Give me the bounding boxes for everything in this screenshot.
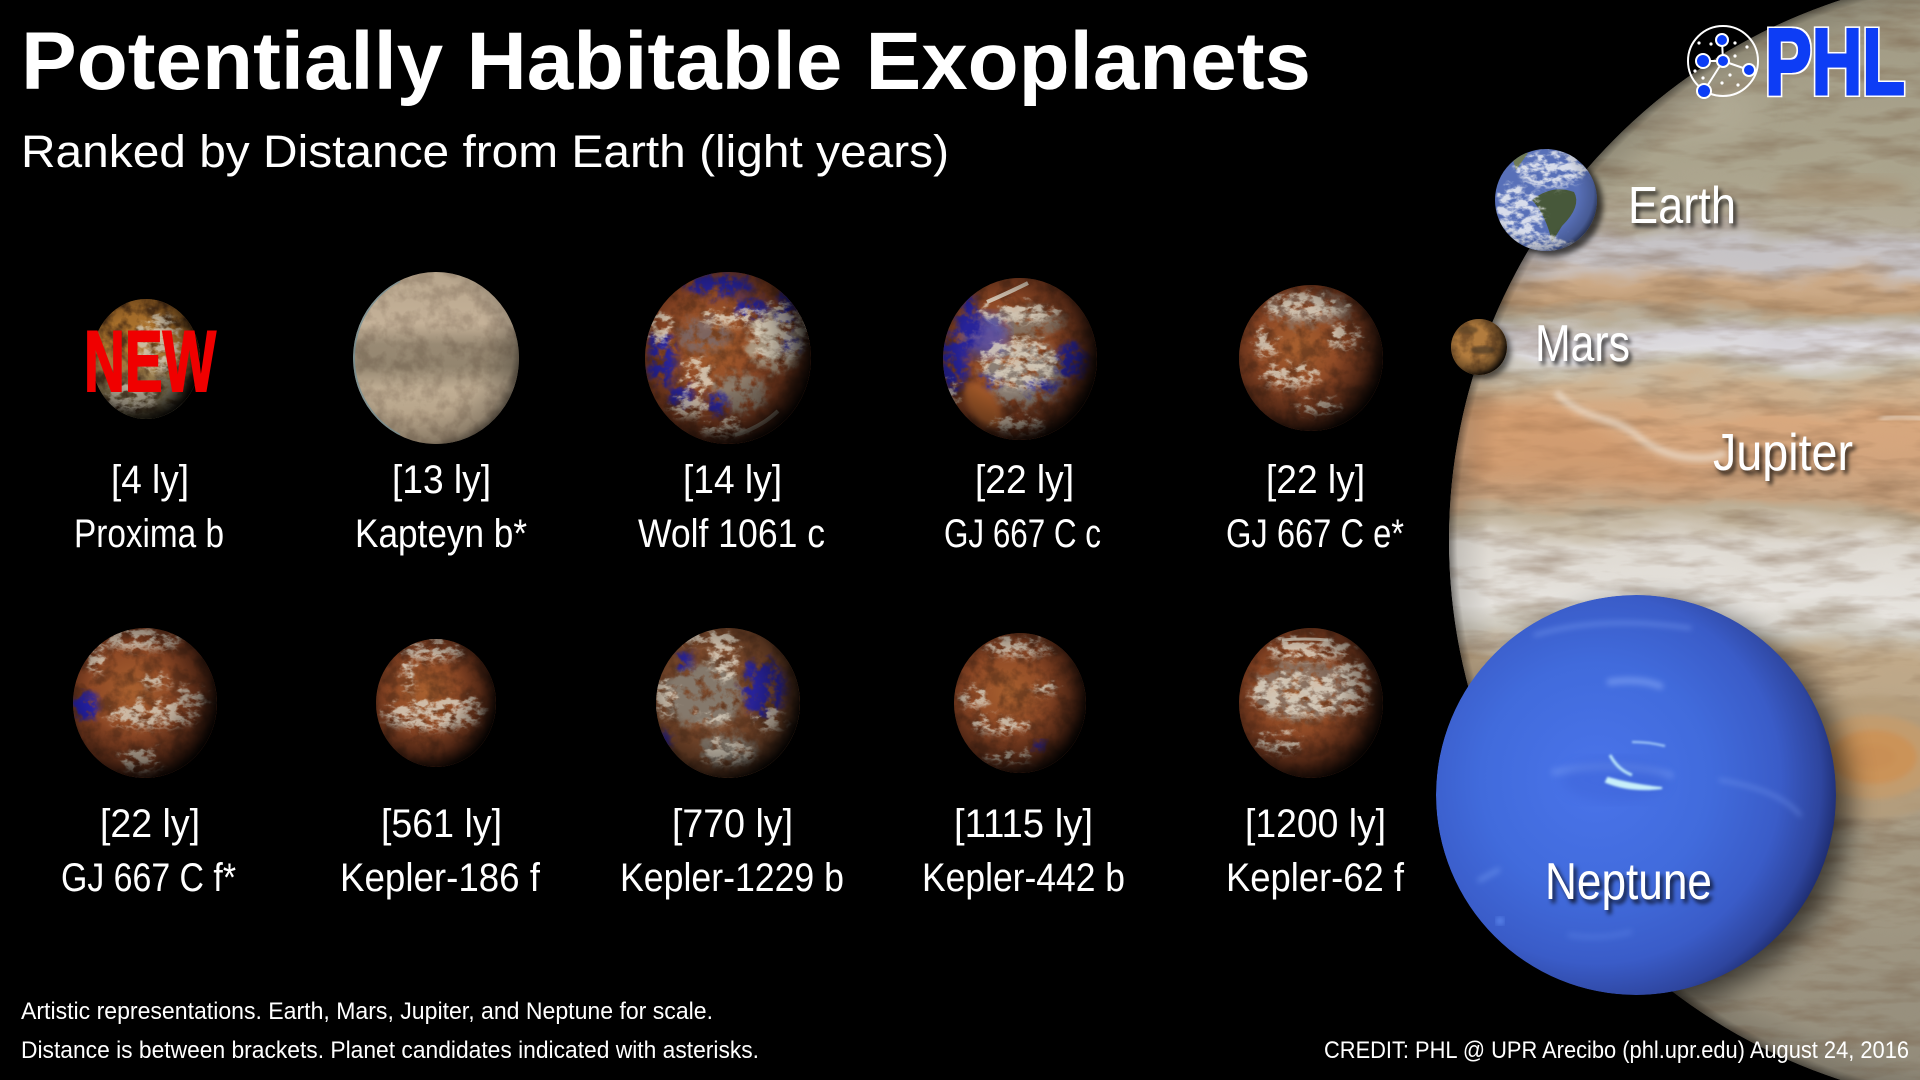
label: Mars: Mars <box>1535 315 1630 373</box>
label: Kepler-186 f: Kepler-186 f <box>340 856 541 900</box>
label: Kepler-1229 b: [770 ly] <box>672 802 793 846</box>
planet: Earth <box>1494 148 1603 256</box>
title: Potentially Habitable Exoplanets <box>21 16 1311 107</box>
label: Kepler-62 f: Kepler-62 f <box>1226 856 1405 900</box>
planet: Wolf 1061 c <box>640 270 816 446</box>
label: Proxima b: Proxima b <box>74 512 224 556</box>
footnote <box>21 998 759 1064</box>
label: Kepler-62 f: [1200 ly] <box>1245 802 1386 846</box>
footnote: Distance is between brackets. Planet candidates indicated with asterisks. <box>21 1037 759 1064</box>
badge: NEW: NEW <box>84 314 217 410</box>
label: Kepler-186 f <box>340 802 541 900</box>
label: GJ 667 C e: [22 ly] <box>1266 458 1365 502</box>
planet: GJ 667 C f <box>70 628 220 778</box>
planet: Kepler-62 f <box>1236 628 1386 778</box>
label: Kapteyn b: Kapteyn b* <box>355 512 527 556</box>
planet: Jupiter <box>1400 0 1920 1080</box>
label: Kapteyn b: [13 ly] <box>392 458 491 502</box>
label: GJ 667 C f <box>61 802 236 900</box>
label: GJ 667 C e <box>1226 458 1404 556</box>
planet: Kepler-442 b <box>950 633 1090 773</box>
label: Proxima b: [4 ly] <box>111 458 189 502</box>
label: Wolf 1061 c: [14 ly] <box>683 458 782 502</box>
planet: Kapteyn b <box>350 272 522 444</box>
label: GJ 667 C f: GJ 667 C f* <box>61 856 236 900</box>
label: Kepler-186 f: [561 ly] <box>381 802 502 846</box>
planet: GJ 667 C c <box>938 277 1102 441</box>
label: GJ 667 C f: [22 ly] <box>100 802 200 846</box>
planet: Kepler-186 f <box>372 639 500 767</box>
label: GJ 667 C c <box>944 458 1101 556</box>
planet: Mars <box>1450 318 1511 379</box>
logo: PHL <box>1688 9 1905 114</box>
label: Proxima b <box>74 458 224 556</box>
planet: Kepler-1229 b <box>652 628 804 780</box>
label: Jupiter: Jupiter <box>1713 424 1853 482</box>
label: Wolf 1061 c <box>638 458 825 556</box>
subtitle: Ranked by Distance from Earth (light years) <box>21 126 949 177</box>
planet: GJ 667 C e <box>1236 283 1386 433</box>
label: GJ 667 C e: GJ 667 C e* <box>1226 512 1404 556</box>
label: GJ 667 C c: GJ 667 C c <box>944 512 1101 556</box>
label: Wolf 1061 c: Wolf 1061 c <box>638 512 825 556</box>
planet: Neptune <box>1436 595 1850 1005</box>
label: Earth: Earth <box>1628 177 1736 235</box>
planet: Proxima b with NEW badge <box>84 295 217 423</box>
label: Kepler-442 b <box>922 802 1125 900</box>
label: Kepler-1229 b <box>620 802 844 900</box>
footnote: Artistic representations. Earth, Mars, Jupiter, and Neptune for scale. <box>21 998 713 1025</box>
label: Kepler-1229 b: Kepler-1229 b <box>620 856 844 900</box>
label: Neptune: Neptune <box>1545 853 1712 911</box>
label: Kepler-442 b: [1115 ly] <box>954 802 1093 846</box>
label: Kapteyn b <box>355 458 527 556</box>
label: Kepler-442 b: Kepler-442 b <box>922 856 1125 900</box>
label: Kepler-62 f <box>1226 802 1405 900</box>
label: GJ 667 C c: [22 ly] <box>975 458 1074 502</box>
